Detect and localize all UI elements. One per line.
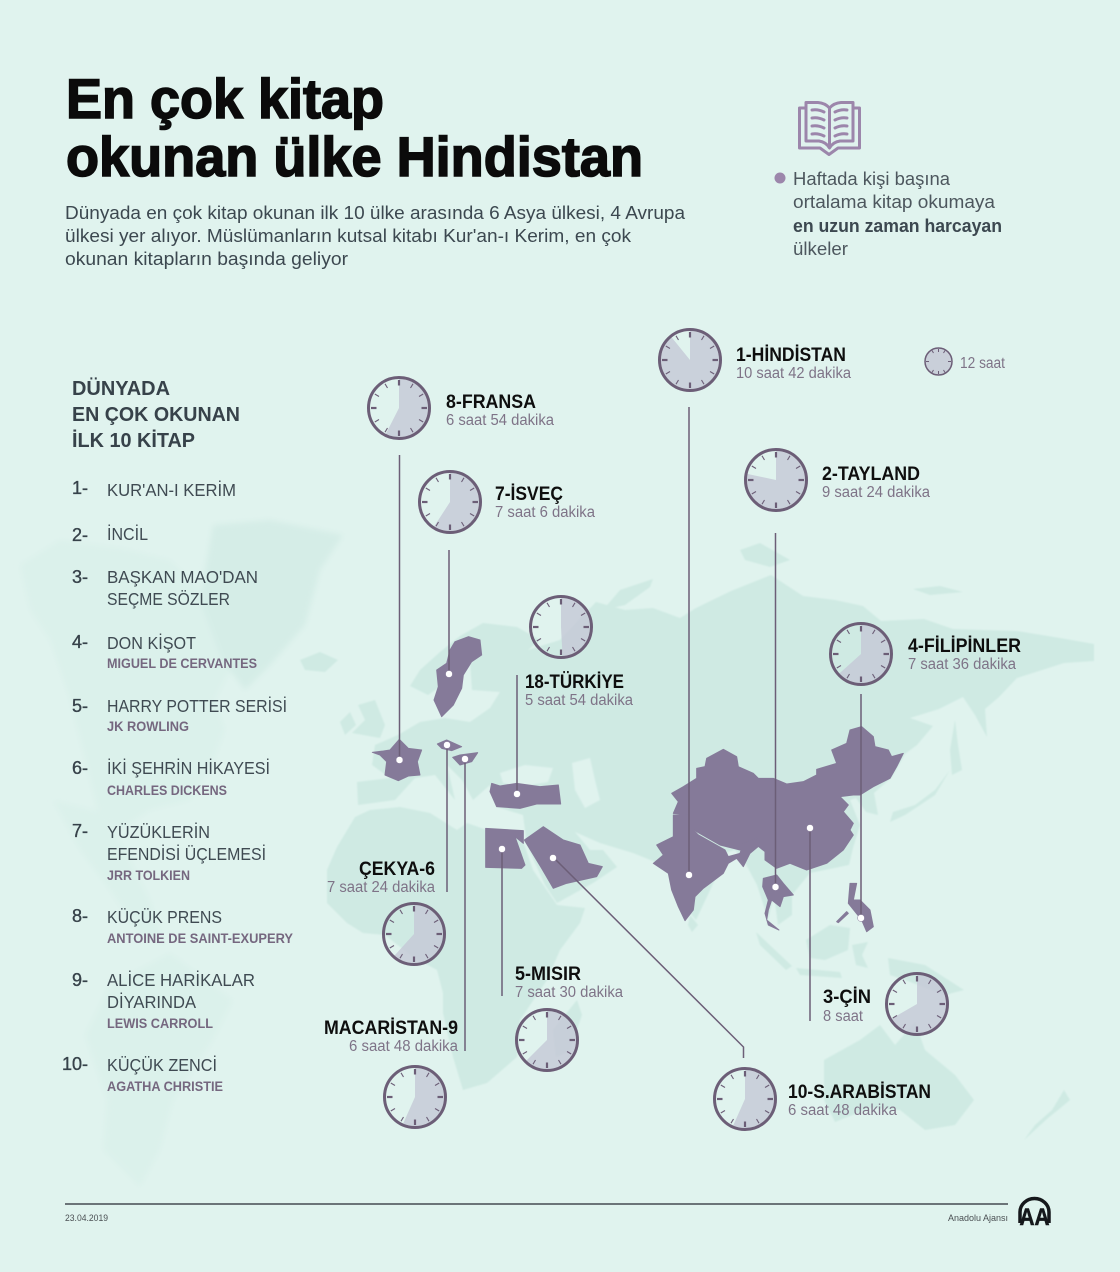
label: France: 8-FRANSA: [446, 392, 536, 413]
book 9: 9-: [72, 970, 88, 990]
label: Hungary: 6 saat 48 dakika: [349, 1038, 458, 1055]
highlighted countries: [372, 637, 903, 932]
book 7: 7-: [72, 821, 88, 841]
legend: 12 hour clock: [925, 348, 1006, 375]
book 10: [62, 1054, 223, 1094]
book 1: 1-: [72, 478, 88, 498]
title: En çok kitap: [66, 67, 384, 130]
label: Saudi Arabia: 6 saat 48 dakika: [788, 1102, 897, 1119]
intro paragraph: okunan kitapların başında geliyor: [65, 249, 348, 269]
clock: India: [660, 330, 720, 390]
legend note: Haftada kişi başına: [793, 169, 951, 189]
book 2: 2-: [72, 525, 88, 545]
book 8: 8-: [72, 906, 88, 926]
book 10: AGATHA CHRISTIE: [107, 1079, 223, 1094]
title: okunan ülke Hindistan: [66, 125, 643, 188]
book 7: [72, 821, 266, 883]
book 6: 6-: [72, 758, 88, 778]
legend note: en uzun zaman harcayan: [793, 216, 1002, 236]
label: Turkey: [525, 672, 633, 709]
book 8: KÜÇÜK PRENS: [107, 907, 222, 927]
book 6: [72, 758, 270, 798]
icon: Anadolu Agency logo: AA: [1020, 1204, 1050, 1231]
label: China: [823, 987, 871, 1025]
label: Czechia: ÇEKYA-6: [359, 859, 435, 880]
connector lines: [396, 407, 864, 1058]
footer: 23.04.2019: [65, 1213, 108, 1224]
label: Egypt: [515, 964, 623, 1001]
intro paragraph: Dünyada en çok kitap okunan ilk 10 ülke arasında 6 Asya ülkesi, 4 Avrupa: [65, 203, 686, 223]
book 9: ALİCE HARİKALAR: [107, 970, 255, 990]
legend note: ülkeler: [793, 239, 848, 259]
book 7: JRR TOLKIEN: [107, 868, 190, 883]
footer: [65, 1204, 1008, 1224]
book 7: EFENDİSİ ÜÇLEMESİ: [107, 844, 266, 864]
label: Saudi Arabia: [788, 1082, 931, 1119]
label: Philippines: 4-FİLİPİNLER: [908, 636, 1021, 657]
label: Turkey: 5 saat 54 dakika: [525, 692, 633, 709]
clock: Saudi Arabia: [714, 1068, 776, 1130]
label: Czechia: [327, 859, 435, 896]
legend note: [774, 169, 1002, 259]
book 3: SEÇME SÖZLER: [107, 589, 230, 609]
book 5: 5-: [72, 696, 88, 716]
clock: Hungary: [384, 1066, 446, 1128]
book 9: [72, 970, 255, 1031]
label: France: [446, 392, 554, 429]
label: Egypt: 7 saat 30 dakika: [515, 984, 623, 1001]
title: [66, 67, 643, 188]
clock: Philippines: [830, 624, 892, 684]
book 2: İNCİL: [107, 524, 148, 544]
countries: Europe and Middle East: [372, 637, 602, 888]
label: India: [736, 345, 851, 382]
book 4: 4-: [72, 632, 88, 652]
book 6: CHARLES DICKENS: [107, 783, 227, 798]
book 1: KUR'AN-I KERİM: [107, 480, 236, 500]
label: France: 6 saat 54 dakika: [446, 412, 554, 429]
heading: top 10 books: EN ÇOK OKUNAN: [72, 404, 240, 426]
label: Hungary: [324, 1018, 458, 1055]
intro paragraph: [65, 203, 686, 269]
clock: Czechia: [384, 904, 444, 964]
world map background: [20, 520, 1094, 1187]
intro paragraph: ülkesi yer alıyor. Müslümanların kutsal kitabı Kur'an-ı Kerim, en çok: [65, 226, 632, 246]
label: China: 8 saat: [823, 1008, 864, 1025]
label: Thailand: 2-TAYLAND: [822, 464, 920, 485]
label: Turkey: 18-TÜRKİYE: [525, 672, 624, 693]
book 3: [72, 567, 258, 609]
label: Sweden: 7 saat 6 dakika: [495, 504, 595, 521]
book 4: MIGUEL DE CERVANTES: [107, 656, 257, 671]
label: India: 10 saat 42 dakika: [736, 365, 851, 382]
label: India: 1-HİNDİSTAN: [736, 345, 846, 366]
heading: top 10 books: DÜNYADA: [72, 377, 170, 400]
legend note: ortalama kitap okumaya: [793, 192, 996, 212]
heading: top 10 books: [72, 377, 240, 452]
footer: Anadolu Ajansı: [948, 1213, 1008, 1224]
label: Sweden: [495, 484, 595, 521]
book 5: HARRY POTTER SERİSİ: [107, 696, 287, 716]
icon: open book: [800, 102, 860, 154]
clock: Sweden: [420, 472, 480, 532]
book 9: DİYARINDA: [107, 992, 196, 1012]
book 3: BAŞKAN MAO'DAN: [107, 567, 258, 587]
countries: China, India, Thailand, Philippines: [653, 727, 903, 932]
heading: top 10 books: İLK 10 KİTAP: [72, 429, 195, 452]
clock: Turkey: [530, 596, 592, 658]
label: Hungary: MACARİSTAN-9: [324, 1018, 458, 1039]
label: Thailand: 9 saat 24 dakika: [822, 484, 930, 501]
book list: [62, 478, 293, 1094]
book 4: DON KİŞOT: [107, 633, 196, 653]
clock: France: [368, 378, 430, 438]
book 8: [72, 906, 293, 946]
book 2: [72, 524, 148, 545]
book 1: [72, 478, 236, 500]
label: China: 3-ÇİN: [823, 987, 871, 1008]
clock: Thailand: [746, 450, 806, 510]
book 9: LEWIS CARROLL: [107, 1016, 213, 1031]
book 6: İKİ ŞEHRİN HİKAYESİ: [107, 758, 270, 778]
book 10: 10-: [62, 1054, 88, 1074]
label: Philippines: 7 saat 36 dakika: [908, 656, 1016, 673]
legend: 12 hour clock: 12 saat: [960, 355, 1006, 372]
book 5: JK ROWLING: [107, 719, 189, 734]
clock: Egypt: [516, 1010, 578, 1070]
clock: China: [886, 974, 948, 1034]
book 10: KÜÇÜK ZENCİ: [107, 1055, 217, 1075]
label: Sweden: 7-İSVEÇ: [495, 484, 563, 505]
label: Czechia: 7 saat 24 dakika: [327, 879, 435, 896]
book 8: ANTOINE DE SAINT-EXUPERY: [107, 931, 293, 946]
label: Thailand: [822, 464, 930, 501]
book 4: [72, 632, 257, 671]
book 3: 3-: [72, 567, 88, 587]
book 5: [72, 696, 287, 734]
label: Philippines: [908, 636, 1021, 673]
label: Egypt: 5-MISIR: [515, 964, 581, 985]
book 7: YÜZÜKLERİN: [107, 822, 210, 842]
label: Saudi Arabia: 10-S.ARABİSTAN: [788, 1082, 931, 1103]
